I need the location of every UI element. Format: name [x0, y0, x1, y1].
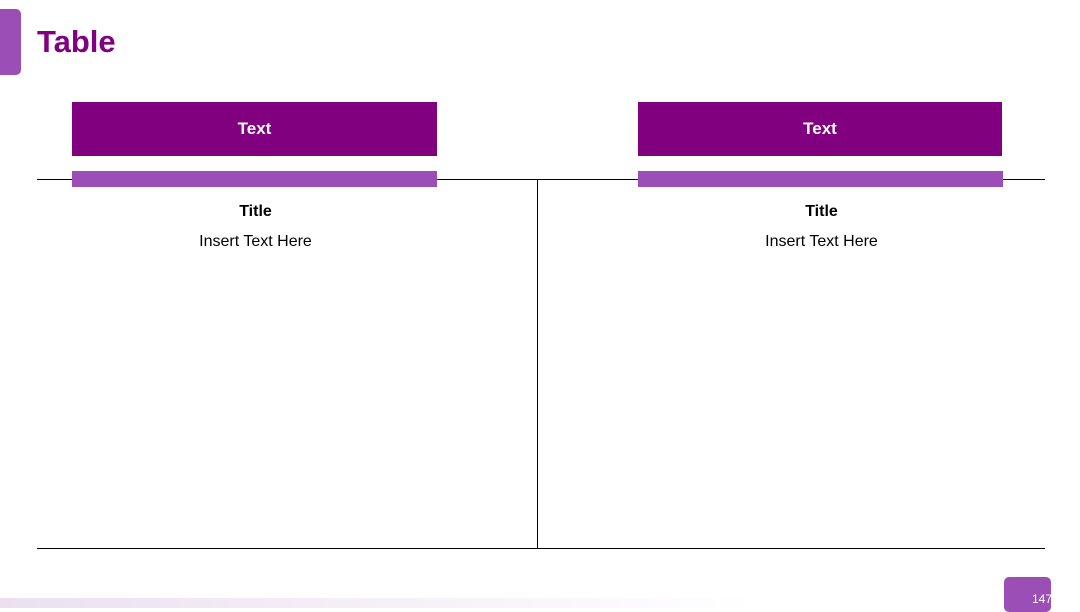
header: right: Text — [803, 119, 837, 138]
title: Table — [37, 24, 116, 59]
bottom gradient strip — [0, 598, 1080, 608]
page number — [1004, 577, 1051, 612]
column left text — [199, 203, 312, 250]
left body: Insert Text Here — [199, 233, 312, 250]
left title: Title — [239, 203, 272, 220]
table lines — [37, 179, 1045, 180]
column right text — [765, 203, 878, 250]
right title: Title — [805, 203, 838, 220]
accent bar: left — [72, 171, 437, 187]
right body: Insert Text Here — [765, 233, 878, 250]
header: left: Text — [238, 119, 271, 138]
accent bar: right — [638, 171, 1003, 187]
header: right — [638, 102, 1002, 156]
accent tab — [0, 9, 21, 75]
header: left — [72, 102, 437, 156]
